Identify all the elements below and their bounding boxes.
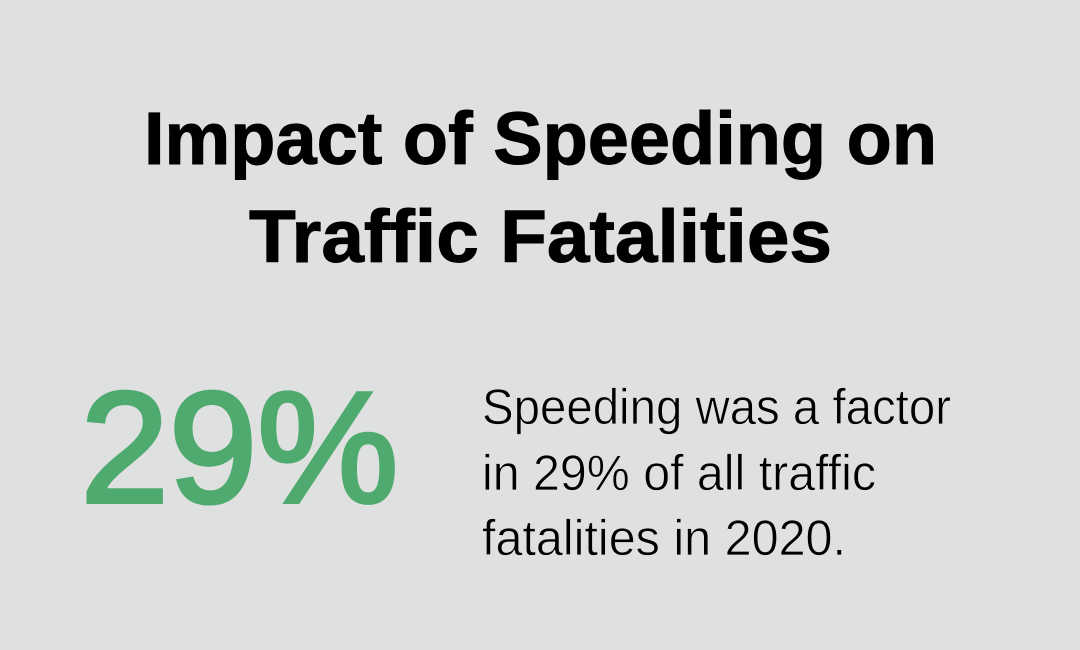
description text: fatalities in 2020.: [482, 510, 846, 566]
description text: Speeding was a factor: [482, 379, 951, 435]
title: Traffic Fatalities: [249, 195, 832, 278]
big statistic: 29%: 29%: [80, 360, 398, 536]
description text: [482, 379, 951, 566]
description text: in 29% of all traffic: [482, 445, 876, 501]
title: Impact of Speeding on: [144, 97, 937, 180]
title: [144, 97, 937, 278]
